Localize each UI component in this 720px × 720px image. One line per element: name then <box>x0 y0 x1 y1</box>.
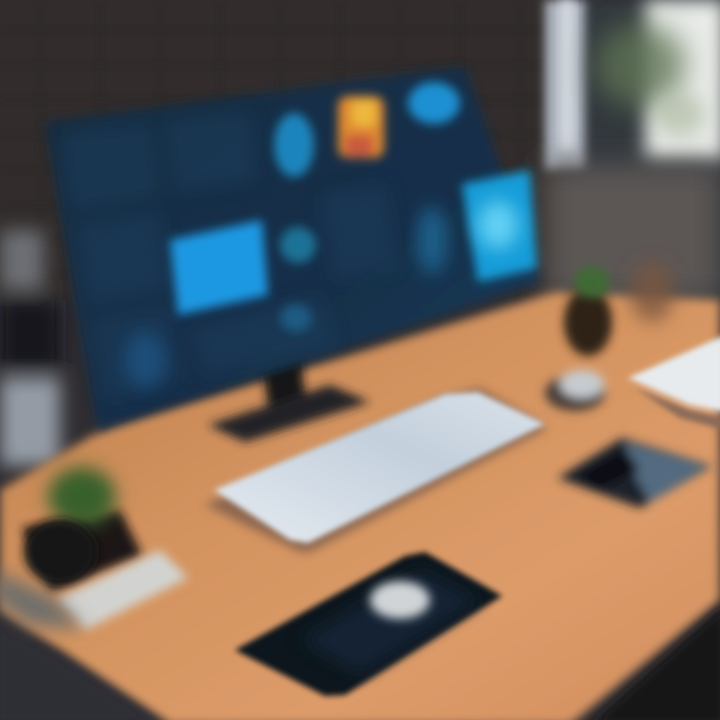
white base <box>55 550 188 630</box>
desk surface <box>0 292 720 720</box>
blue icon top <box>274 113 314 177</box>
keyboard <box>205 388 548 552</box>
monitor screen <box>45 66 540 432</box>
orange icon <box>338 96 384 158</box>
dim tile right <box>417 206 447 274</box>
window and pillar <box>545 0 720 300</box>
tablet front <box>235 552 502 696</box>
phone on desk right <box>558 438 712 508</box>
blue icon top right <box>408 82 460 124</box>
small plant right <box>564 266 612 356</box>
bottom right dark floor <box>590 605 720 720</box>
small tile center <box>280 227 316 263</box>
bottom left dark floor <box>0 625 165 720</box>
mouse <box>545 370 605 411</box>
bright window center-left <box>170 220 268 315</box>
terracotta pot <box>630 262 674 322</box>
tablet button <box>370 581 430 619</box>
monitor stand <box>208 355 370 442</box>
screen tiles <box>62 112 398 400</box>
potted plant left <box>0 467 188 630</box>
bright tile right <box>462 170 537 282</box>
left shelf objects <box>0 230 60 466</box>
right paper stack <box>628 335 720 430</box>
dim glow lower <box>280 304 312 332</box>
